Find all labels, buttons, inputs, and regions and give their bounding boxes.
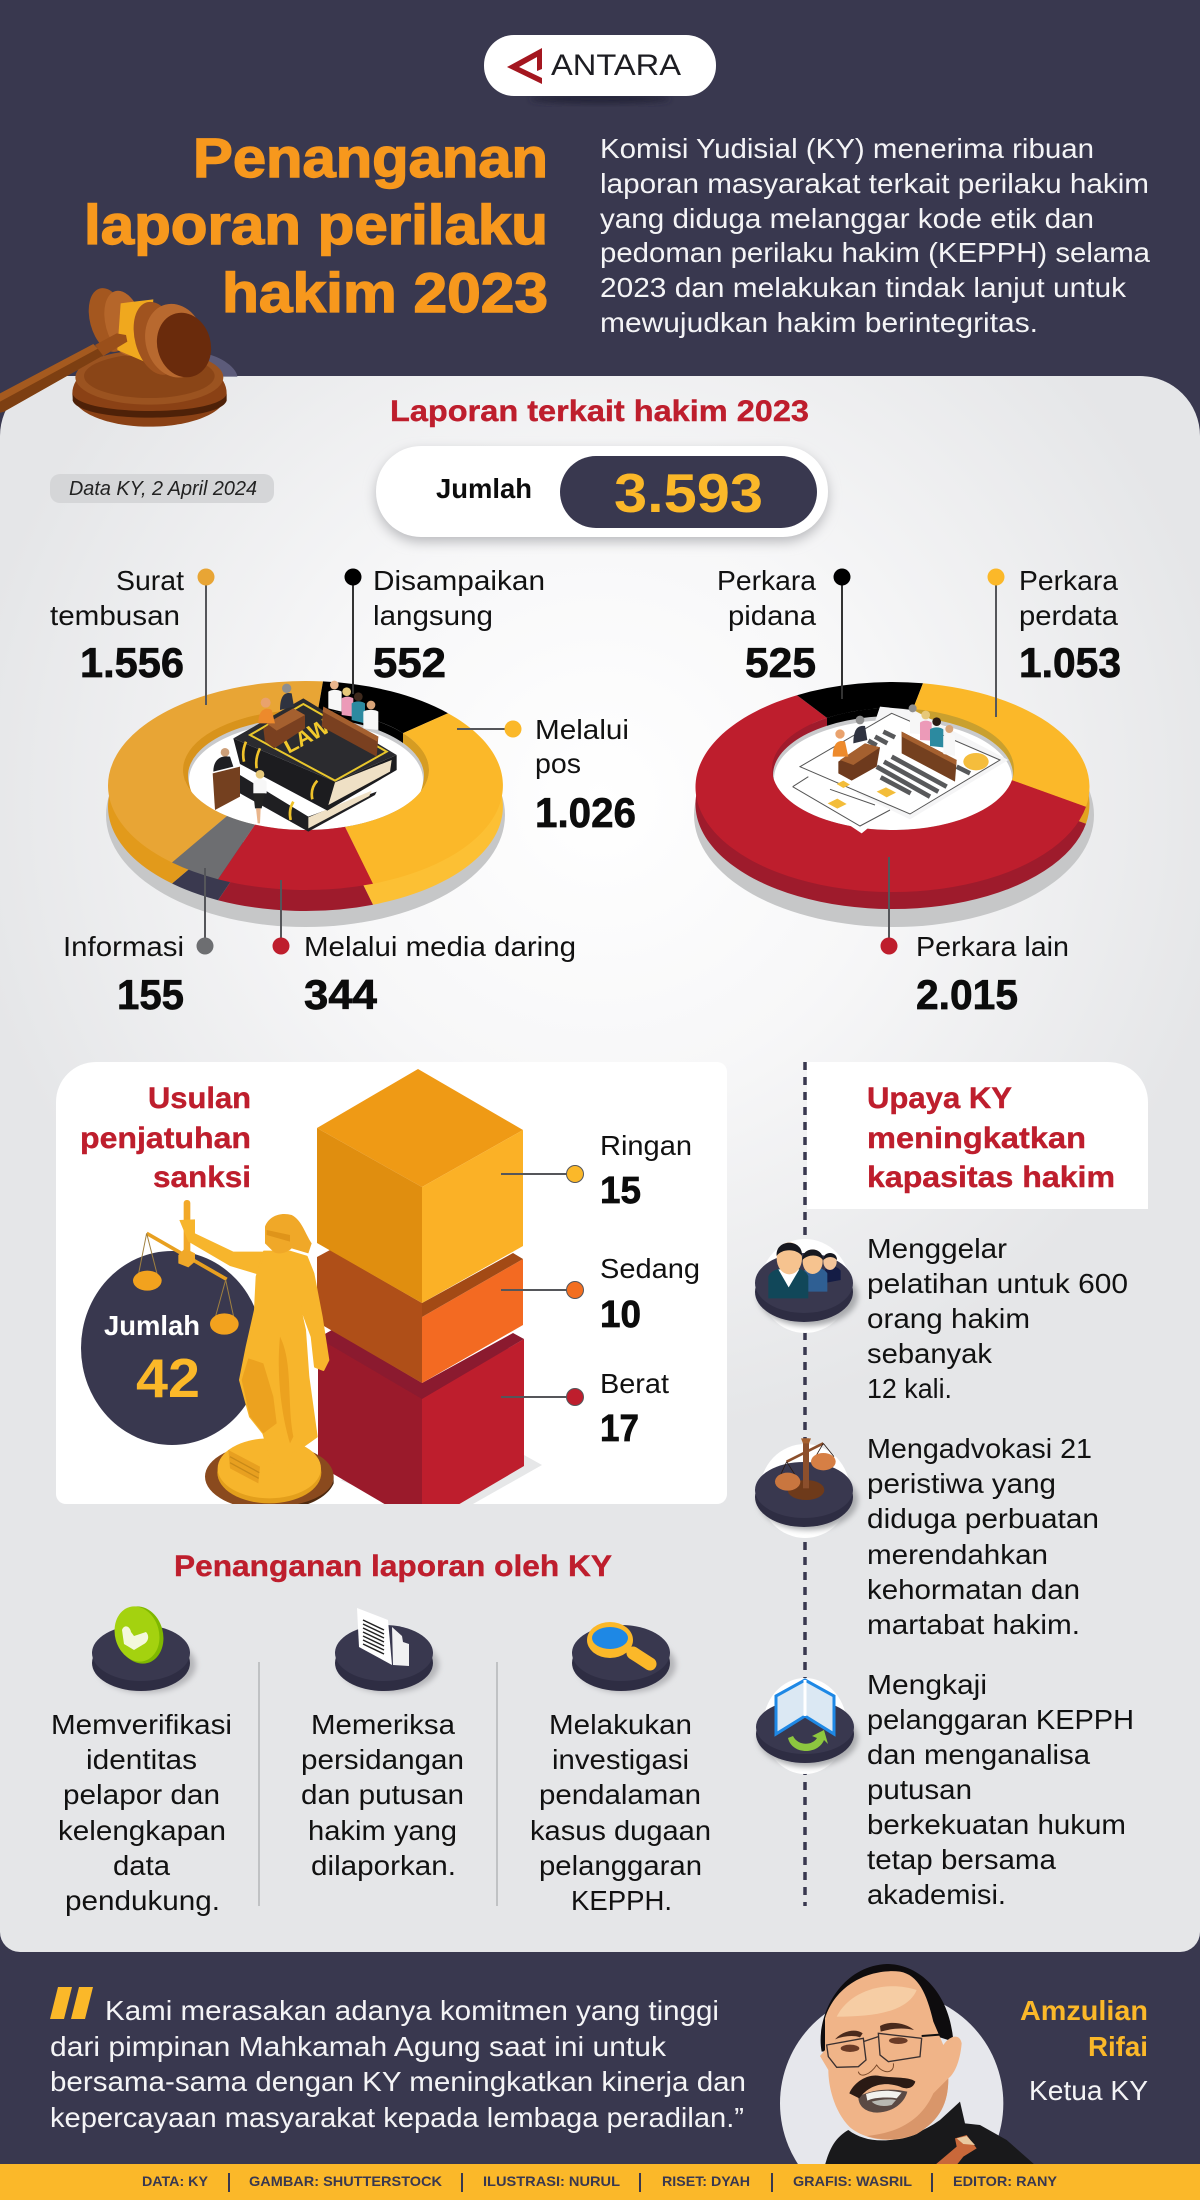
text: upaya 2: martabat hakim.	[867, 1609, 1080, 1640]
title: laporan perilaku	[84, 193, 548, 256]
intro text: pedoman perilaku hakim (KEPPH) selama	[600, 237, 1150, 268]
stacked cubes	[317, 1069, 542, 1526]
text: upaya 3: putusan	[867, 1774, 972, 1805]
text column: memeriksa: persidangan	[301, 1744, 464, 1775]
label: Disampaikan langsung: langsung	[373, 600, 493, 631]
text: upaya 2	[867, 1433, 1099, 1640]
cube: sedang	[317, 1250, 523, 1383]
text: upaya 3: Mengkaji	[867, 1669, 987, 1700]
icon: quote mark	[50, 1987, 93, 2019]
connector labels	[501, 1130, 700, 1450]
text: upaya 1	[867, 1233, 1128, 1404]
text: upaya 2: peristiwa yang	[867, 1468, 1056, 1499]
logo: ANTARA: ANTARA	[551, 49, 681, 82]
body	[825, 2102, 1035, 2165]
label: Informasi: Informasi	[63, 931, 184, 962]
text: upaya 2: merendahkan	[867, 1539, 1048, 1570]
icon: verification	[92, 1601, 196, 1693]
label: Perkara perdata	[988, 565, 1121, 717]
illustration: law books and court	[213, 681, 397, 832]
label: Melalui pos: pos	[535, 748, 581, 779]
label: Surat tembusan: Surat	[116, 565, 184, 596]
label: Berat: Berat	[600, 1368, 669, 1399]
arm	[179, 1219, 268, 1275]
illustration: documents and court	[792, 704, 1008, 833]
intro text: Komisi Yudisial (KY) menerima ribuan	[600, 133, 1094, 164]
court figures	[833, 704, 955, 757]
footer credits: DATA: KY	[142, 2173, 209, 2189]
label: Melalui media daring	[272, 880, 576, 1018]
label: Perkara lain: 2.015	[916, 971, 1018, 1018]
quote text: bersama-sama dengan KY meningkatkan kinerja dan	[50, 2066, 746, 2097]
donut chart: jenis perkara	[694, 682, 1094, 927]
label: Melalui media daring: Melalui media daring	[304, 931, 576, 962]
cube: berat	[318, 1330, 524, 1504]
text column: melakukan: KEPPH.	[571, 1885, 672, 1916]
label: Perkara perdata: Perkara	[1019, 565, 1118, 596]
total circle: 42	[136, 1347, 200, 1409]
label: Surat tembusan: 1.556	[80, 639, 184, 686]
donut labels left	[50, 565, 636, 1018]
label: Berat: 17	[600, 1408, 639, 1450]
text column: memverifikasi: kelengkapan	[58, 1815, 226, 1846]
text: upaya 2: kehormatan dan	[867, 1574, 1080, 1605]
label: Sedang: 10	[600, 1294, 641, 1336]
footer credits: RISET: DYAH	[662, 2173, 750, 2189]
name: Amzulian Rifai	[1020, 1995, 1148, 2106]
label: Sedang	[501, 1253, 700, 1336]
name: Amzulian Rifai: Amzulian	[1020, 1995, 1148, 2026]
segment: Perkara pidana	[797, 682, 923, 718]
head	[265, 1214, 312, 1253]
label: Informasi: 155	[117, 971, 184, 1018]
text: upaya 3: tetap bersama	[867, 1844, 1056, 1875]
body	[239, 1250, 330, 1446]
illustration: law books and court: LAW	[279, 713, 334, 758]
label: Perkara pidana: 525	[745, 639, 816, 686]
label: Informasi	[63, 868, 214, 1018]
intro text: yang diduga melanggar kode etik dan	[600, 203, 1094, 234]
text: upaya 1: Menggelar	[867, 1233, 1007, 1264]
label: Sedang: Sedang	[600, 1253, 700, 1284]
text column: memverifikasi: Memverifikasi	[51, 1709, 232, 1740]
nose	[858, 2063, 893, 2075]
text column: memeriksa: dilaporkan.	[311, 1850, 456, 1881]
text: upaya 3: akademisi.	[867, 1879, 1006, 1910]
label: Perkara perdata: perdata	[1019, 600, 1118, 631]
label: Melalui pos	[457, 714, 636, 836]
icon: scales	[755, 1438, 858, 1538]
icon: gavel	[0, 284, 237, 427]
label: Disampaikan langsung: Disampaikan	[373, 565, 545, 596]
text column: memverifikasi: pelapor dan	[63, 1779, 220, 1810]
logo: ANTARA	[484, 35, 716, 104]
text: upaya 3: pelanggaran KEPPH	[867, 1704, 1134, 1735]
quote text: Kami merasakan adanya komitmen yang tinggi	[105, 1995, 719, 2026]
segment: Perkara perdata	[913, 683, 1089, 807]
label: Perkara pidana: Perkara	[717, 565, 816, 596]
total pill	[376, 446, 828, 542]
text: upaya 1: sebanyak	[867, 1338, 993, 1369]
heading: usulan penjatuhan sanksi: Usulan	[148, 1082, 251, 1115]
quote text	[50, 1995, 746, 2133]
text column: memeriksa	[301, 1709, 464, 1881]
label: Perkara pidana: pidana	[728, 600, 816, 631]
footer credits: GAMBAR: SHUTTERSTOCK	[249, 2173, 442, 2189]
text: upaya 3: dan menganalisa	[867, 1739, 1090, 1770]
label: Melalui pos: Melalui	[535, 714, 629, 745]
title: Penanganan	[193, 126, 548, 189]
total pill: Jumlah	[436, 473, 532, 504]
text column: melakukan: kasus dugaan	[530, 1815, 711, 1846]
label: Perkara lain	[880, 857, 1069, 1018]
text column: memeriksa: dan putusan	[301, 1779, 464, 1810]
text: upaya 3	[867, 1669, 1134, 1910]
text column: melakukan: pelanggaran	[539, 1850, 702, 1881]
heading: usulan penjatuhan sanksi	[80, 1082, 251, 1194]
label: Surat tembusan: tembusan	[50, 600, 180, 631]
text column: memverifikasi: data	[113, 1850, 170, 1881]
donut chart: sumber laporan	[106, 681, 505, 927]
footer credits	[0, 2164, 1200, 2200]
face	[820, 1971, 962, 2140]
text column: memeriksa: hakim yang	[308, 1815, 457, 1846]
text column: memverifikasi: identitas	[86, 1744, 197, 1775]
quote text: dari pimpinan Mahkamah Agung saat ini untuk	[50, 2031, 667, 2062]
panel: usulan penjatuhan sanksi	[56, 1062, 727, 1526]
title	[84, 126, 548, 324]
court figures	[213, 681, 378, 823]
text: upaya 1: pelatihan untuk 600	[867, 1268, 1128, 1299]
icon: documents	[335, 1608, 439, 1693]
text column: melakukan: pendalaman	[539, 1779, 701, 1810]
text: upaya 2: Mengadvokasi 21	[867, 1433, 1092, 1464]
label: Perkara lain: Perkara lain	[916, 931, 1069, 962]
label: Melalui pos: 1.026	[535, 789, 636, 836]
heading: Laporan terkait hakim 2023: Laporan terkait hakim 2023	[390, 395, 809, 428]
name: Amzulian Rifai: Rifai	[1088, 2031, 1148, 2062]
cube: ringan	[317, 1069, 523, 1303]
main light panel	[0, 376, 1200, 1952]
icon: open book with arrow	[756, 1678, 858, 1774]
label: Perkara perdata: 1.053	[1019, 639, 1121, 686]
intro text: mewujudkan hakim berintegritas.	[600, 307, 1038, 338]
label: Melalui media daring: 344	[304, 971, 378, 1018]
label: Ringan: 15	[600, 1170, 641, 1212]
icon: lady justice statue	[133, 1200, 334, 1510]
segment: Melalui media daring	[218, 825, 373, 890]
heading: usulan penjatuhan sanksi: sanksi	[153, 1161, 251, 1194]
tag: data source: Data KY, 2 April 2024	[69, 478, 257, 500]
label: Perkara pidana	[717, 565, 850, 699]
icon: judges group	[755, 1239, 858, 1333]
upper book	[233, 738, 397, 811]
panel: upaya KY heading: Upaya KY	[867, 1082, 1012, 1115]
judges desk	[838, 743, 880, 781]
footer credits: ILUSTRASI: NURUL	[483, 2173, 620, 2189]
sword	[184, 1200, 190, 1257]
judges desk	[263, 708, 305, 748]
intro text	[600, 133, 1150, 338]
text column: melakukan: investigasi	[552, 1744, 689, 1775]
text: upaya 3: berkekuatan hukum	[867, 1809, 1126, 1840]
tag: data source	[50, 474, 274, 503]
intro text: 2023 dan melakukan tindak lanjut untuk	[600, 272, 1127, 303]
label: Disampaikan langsung	[344, 565, 545, 694]
text: upaya 1: orang hakim	[867, 1303, 1030, 1334]
text: upaya 2: diduga perbuatan	[867, 1503, 1099, 1534]
label: Ringan: Ringan	[600, 1130, 692, 1161]
label: Disampaikan langsung: 552	[373, 639, 446, 686]
brows	[835, 2023, 914, 2039]
quote text: kepercayaan masyarakat kepada lembaga peradilan.”	[50, 2102, 744, 2133]
hair	[821, 1964, 953, 2052]
panel: upaya KY heading	[807, 1062, 1148, 1209]
donut labels right	[717, 565, 1121, 1018]
text column: memverifikasi: pendukung.	[65, 1885, 220, 1916]
intro text: laporan masyarakat terkait perilaku hakim	[600, 168, 1149, 199]
label: Ringan	[501, 1130, 692, 1212]
total circle	[81, 1251, 263, 1445]
heading: Penanganan laporan oleh KY: Penanganan laporan oleh KY	[174, 1550, 612, 1583]
scales	[147, 1233, 227, 1279]
timeline dashed line	[803, 1062, 807, 1906]
total pill: 3.593	[614, 462, 763, 524]
portrait: Amzulian Rifai	[780, 1964, 1034, 2164]
name: Amzulian Rifai: Ketua KY	[1029, 2075, 1148, 2106]
eyes	[841, 2045, 859, 2052]
label: Surat tembusan	[50, 565, 214, 705]
segment: Perkara lain	[695, 695, 1086, 892]
label: Berat	[501, 1368, 669, 1450]
text: upaya 1: 12 kali.	[867, 1373, 952, 1404]
panel: upaya KY heading: kapasitas hakim	[867, 1161, 1115, 1194]
segment: Surat tembusan	[108, 681, 323, 862]
moustache and mouth	[858, 2090, 907, 2113]
total circle: Jumlah	[104, 1310, 200, 1341]
footer credits: EDITOR: RANY	[953, 2173, 1058, 2189]
text column: melakukan	[530, 1709, 711, 1916]
title: hakim 2023	[222, 261, 548, 324]
text column: memeriksa: Memeriksa	[311, 1709, 455, 1740]
text column: memverifikasi	[51, 1709, 232, 1916]
segment: Informasi	[172, 816, 255, 879]
text column: melakukan: Melakukan	[549, 1709, 692, 1740]
icon: magnifier	[572, 1622, 676, 1693]
glasses	[827, 2033, 922, 2067]
segment: Melalui pos	[345, 713, 503, 884]
footer credits: GRAFIS: WASRIL	[793, 2173, 912, 2189]
lower book	[240, 775, 377, 832]
heading: usulan penjatuhan sanksi: penjatuhan	[80, 1122, 251, 1155]
panel: upaya KY heading: meningkatkan	[867, 1122, 1086, 1155]
segment: Disampaikan langsung	[318, 681, 448, 733]
